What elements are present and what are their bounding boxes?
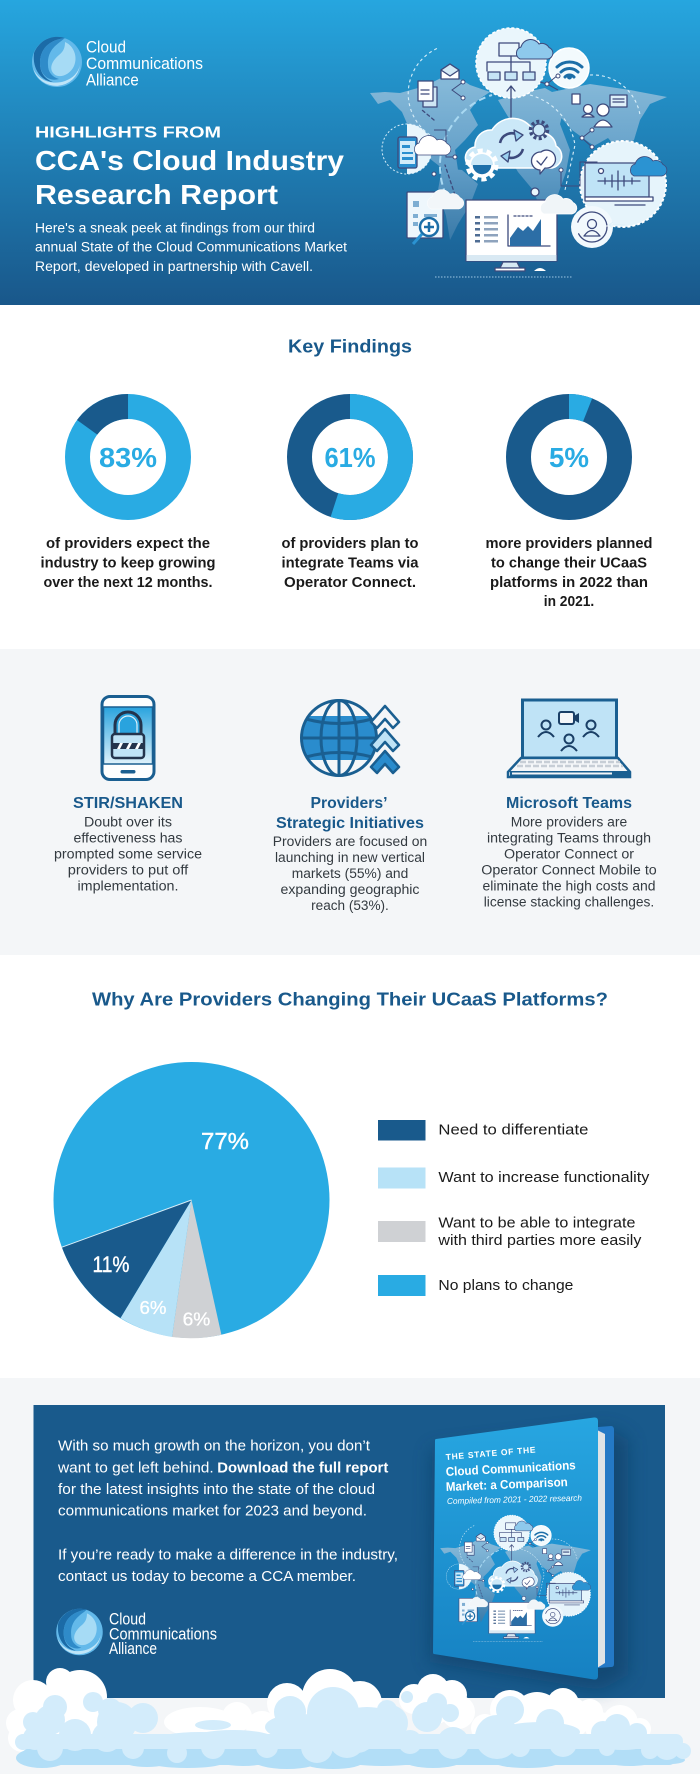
panel: finding 61% [282,406,419,591]
header title: Research Report [35,179,278,210]
caption: in 2021. [544,594,594,610]
book title: THE STATE OF THE [445,1444,536,1462]
text block: strategic initiatives: reach (53%). [311,898,389,913]
text block: download: Download the full report [217,1459,388,1476]
caption [40,536,216,591]
pie chart [54,1062,330,1338]
text block: strategic initiatives: Providers’ [310,795,388,812]
text block: download: for the latest insights into the state of the cloud [58,1481,375,1498]
text block: download: If you’re ready to make a difference in the industry, [58,1546,398,1563]
donut chart 5% [518,406,620,508]
text block: strategic initiatives: Strategic Initiatives [276,815,424,832]
text block: strategic initiatives: markets (55%) and [292,866,408,881]
icon: laptop video call [508,700,630,777]
header panel [0,0,700,305]
book title [445,1444,582,1506]
legend [378,1120,650,1296]
text block: STIR/SHAKEN: effectiveness has [74,831,183,846]
caption: Operator Connect. [284,575,416,591]
legend: Need to differentiate [438,1123,588,1139]
text block: download: communications market for 2023 and beyond. [58,1503,367,1520]
text block: strategic initiatives: expanding geographic [280,882,420,897]
footer logo [56,1609,217,1658]
text block: strategic initiatives: launching in new vertical [275,850,425,865]
book title: Compiled from 2021 - 2022 research [447,1493,582,1506]
header logo [32,37,203,90]
caption: of providers plan to [282,536,419,552]
caption [486,536,652,610]
caption: to change their UCaaS [491,556,647,572]
caption: integrate Teams via [282,556,419,572]
text block: STIR/SHAKEN: Doubt over its [84,815,172,830]
header eyebrow: HIGHLIGHTS FROM [35,124,221,141]
header logo: Alliance [86,72,139,90]
book cover illustration [440,1515,591,1641]
text block: Microsoft Teams [481,795,657,910]
text block: STIR/SHAKEN: implementation. [78,879,178,894]
header title [35,145,344,210]
donut chart 5%: 5% [549,442,589,473]
header intro text [35,221,347,274]
text block: Microsoft Teams: More providers are [511,815,627,830]
clouds [6,1668,691,1769]
caption: more providers planned [486,536,652,552]
text block: Microsoft Teams: Operator Connect or [504,847,635,862]
donut chart 83% [57,386,199,528]
text block: Microsoft Teams: Operator Connect Mobile to [481,863,657,878]
panel: finding 83% [40,386,216,591]
header intro text: Report, developed in partnership with Cavell. [35,259,313,274]
donut chart 61% [300,406,400,508]
caption: over the next 12 months. [44,575,212,591]
footer logo: Cloud [109,1610,146,1628]
text block: Microsoft Teams: Microsoft Teams [506,795,632,812]
text block: Microsoft Teams: integrating Teams through [487,831,651,846]
text block: Microsoft Teams: eliminate the high costs and [482,879,656,894]
text block: strategic initiatives [273,795,427,913]
legend: with third parties more easily [437,1233,642,1249]
donut chart 61%: 61% [324,442,376,473]
footer logo: Alliance [109,1640,157,1658]
header title: CCA's Cloud Industry [35,145,344,176]
legend: Want to increase functionality [438,1170,650,1186]
panel: finding 5% [486,406,652,610]
panel: trends [0,649,700,955]
caption: platforms in 2022 than [490,575,648,591]
heading: key findings: Key Findings [288,336,412,357]
text block: STIR/SHAKEN: STIR/SHAKEN [73,795,183,812]
icon: phone with lock [102,696,154,780]
caption: industry to keep growing [40,556,216,572]
legend: Want to be able to integrate [438,1216,635,1232]
text block: STIR/SHAKEN [54,795,202,894]
heading: why changing platforms: Why Are Providers Changing Their UCaaS Platforms? [92,989,608,1010]
footer logo: Communications [109,1625,217,1643]
legend: No plans to change [438,1278,573,1294]
text block: STIR/SHAKEN: providers to put off [68,863,189,878]
caption: of providers expect the [46,536,210,552]
panel: footer call to action [0,1378,700,1774]
text block: Microsoft Teams: license stacking challenges. [484,895,654,910]
illustration: cloud network world map [370,28,667,277]
header intro text: Here's a sneak peek at findings from our third [35,221,315,236]
header intro text: annual State of the Cloud Communications Market [35,240,347,255]
text block: download: With so much growth on the horizon, you don’t [58,1438,371,1455]
text block: STIR/SHAKEN: prompted some service [54,847,202,862]
icon: globe with chevrons [302,700,399,776]
header logo: Communications [86,55,203,73]
text block: download: contact us today to become a CCA member. [58,1568,356,1585]
text block: strategic initiatives: Providers are focused on [273,834,427,849]
book title: Market: a Comparison [446,1475,568,1494]
report book [430,1417,628,1690]
donut chart 83%: 83% [99,442,157,473]
pie chart: 11% [92,1252,130,1277]
text block: download: want to get left behind. [57,1459,214,1476]
pie chart: 77% [201,1128,249,1154]
header logo: Cloud [86,39,126,57]
pie chart: 6% [140,1298,166,1318]
pie chart: 6% [183,1310,210,1330]
book title: Cloud Communications [445,1458,576,1479]
text block: download [57,1438,398,1585]
caption [282,536,419,591]
